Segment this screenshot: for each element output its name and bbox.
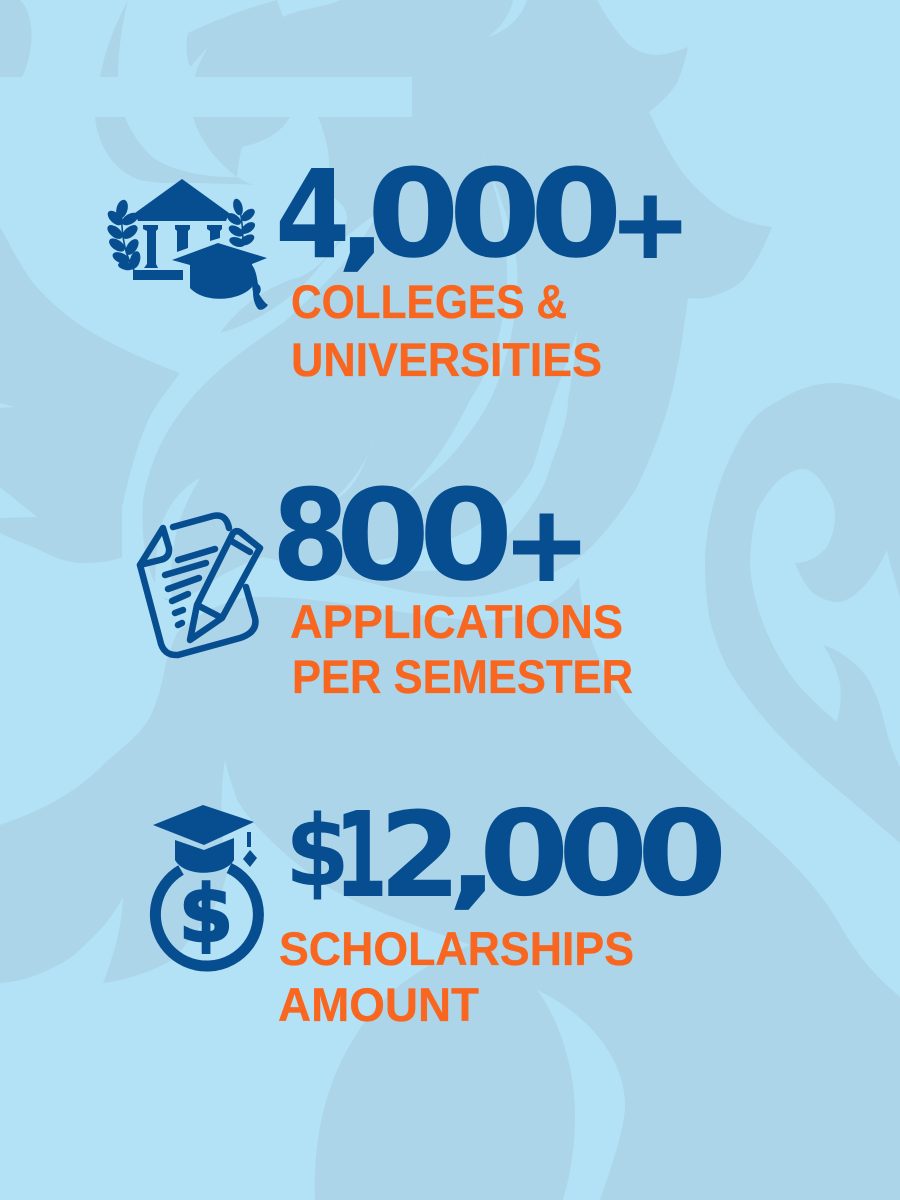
icon: money ring with graduation cap xyxy=(153,805,258,966)
stat number: 800+: + xyxy=(503,483,590,605)
stat number: $12,000: 000 xyxy=(479,786,727,923)
stat number: $12,000: $ xyxy=(285,794,350,909)
stat number: 800+: 8 xyxy=(272,462,349,609)
stat number: $12,000: 2 xyxy=(379,786,461,924)
icon: left laurel branch xyxy=(105,198,142,275)
label: scholarships amount: SCHOLARSHIPS xyxy=(279,922,634,975)
stat number: 800+: 00 xyxy=(336,462,513,609)
icon: application paper and pencil xyxy=(140,516,260,655)
label: colleges and universities xyxy=(291,275,602,386)
label: scholarships amount: AMOUNT xyxy=(278,978,479,1031)
icon: right laurel branch xyxy=(225,198,257,249)
stat number: 4,000+: + xyxy=(610,168,690,280)
icon: money ring with graduation cap: $ xyxy=(179,870,233,960)
stat number: 4,000+ xyxy=(275,144,690,287)
stat number: 4,000+: , xyxy=(336,160,388,282)
stat number: $12,000 xyxy=(285,786,727,925)
label: colleges and universities: UNIVERSITIES xyxy=(291,333,602,386)
stat number: $12,000: , xyxy=(447,798,499,920)
label: applications per semester xyxy=(290,595,633,703)
stat number: $12,000: 1 xyxy=(335,788,388,925)
label: applications per semester: APPLICATIONS xyxy=(290,595,623,648)
label: scholarships amount xyxy=(278,922,634,1031)
stat number: 4,000+: 4 xyxy=(275,145,350,287)
stat number: 800+ xyxy=(272,462,590,609)
icon: university building with laurels and graduation cap xyxy=(105,179,268,310)
label: applications per semester: PER SEMESTER xyxy=(292,650,633,703)
label: colleges and universities: COLLEGES & xyxy=(291,275,567,328)
stat number: 4,000+: 000 xyxy=(367,144,622,286)
